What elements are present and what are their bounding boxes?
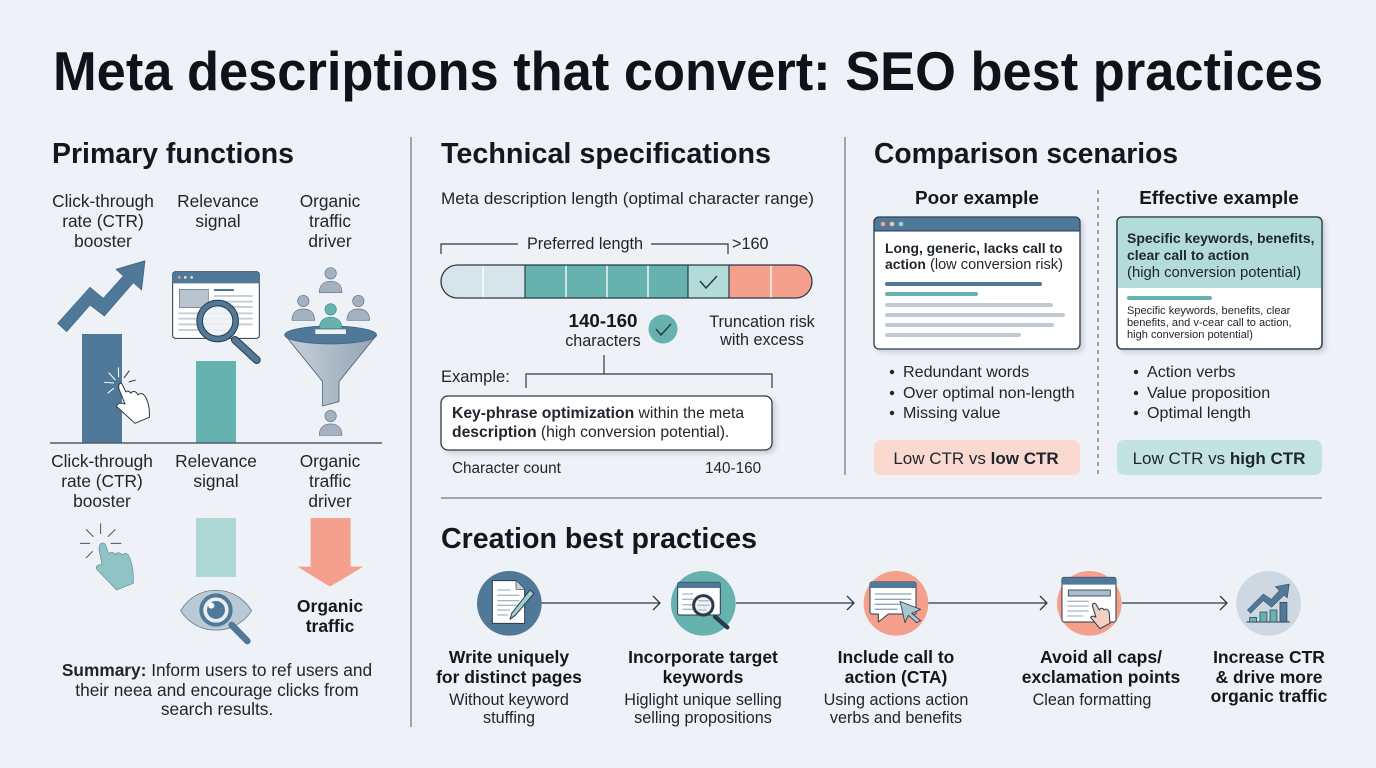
top labels: Organic [300, 191, 361, 211]
lower labels: Organic [300, 451, 361, 471]
heading: primary functions: Primary functions [52, 138, 294, 170]
subheading: effective example: Effective example [1139, 188, 1299, 209]
top labels: driver [308, 231, 352, 251]
icon: browser with magnifier [173, 272, 259, 360]
step 1: Without keyword [449, 691, 569, 709]
callout: truncation risk: with excess [719, 331, 804, 349]
step 4: Avoid all caps/ [1040, 647, 1162, 667]
card: effective example: benefits, and v-cear call to action, [1127, 317, 1292, 329]
bracket: preferred length: >160 [732, 235, 768, 253]
icon: eye with magnifier [181, 590, 252, 641]
icon: browser and hand [1057, 571, 1122, 636]
lower labels: traffic [309, 471, 351, 491]
heading: creation best practices: Creation best practices [441, 523, 757, 555]
subtitle: Meta description length (optimal character range) [441, 190, 814, 208]
icon: rising zigzag arrow [58, 261, 145, 332]
lower labels: booster [73, 491, 131, 511]
panel: comparison scenarios [874, 138, 1322, 475]
summary [62, 660, 372, 719]
pill: low CTR: Low CTR vs low CTR [893, 449, 1059, 468]
step 3 [824, 571, 968, 727]
label: organic traffic: traffic [306, 616, 355, 636]
callout: 140-160 characters: 140-160 [569, 310, 637, 331]
card: effective example: (high conversion potential) [1127, 265, 1301, 281]
character count [452, 460, 761, 477]
step 2: Higlight unique selling [624, 691, 782, 709]
step 5: Increase CTR [1213, 647, 1325, 667]
pill: high CTR [1117, 440, 1322, 475]
card: effective example: clear call to action [1127, 247, 1249, 263]
arrows [541, 596, 1227, 610]
lower labels: Relevance [175, 451, 257, 471]
callout: 140-160 characters: characters [565, 332, 641, 350]
icon: growth chart [1236, 571, 1301, 636]
step 5 [1211, 571, 1328, 706]
label: example: Example: [441, 368, 510, 386]
summary: their neea and encourage clicks from [75, 680, 359, 700]
title: Meta descriptions that convert: SEO best practices [53, 40, 1323, 102]
character count: 140-160 [705, 460, 761, 477]
top labels: Click-through [52, 191, 154, 211]
step 2: Incorporate target [628, 647, 778, 667]
icon: browser search [671, 571, 736, 636]
callout: truncation risk [709, 313, 816, 349]
heading: comparison scenarios: Comparison scenarios [874, 138, 1178, 170]
summary: Summary: Inform users to ref users and [62, 660, 372, 680]
card: effective example: high conversion potential) [1127, 329, 1253, 341]
bar: relevance [196, 361, 236, 443]
summary: search results. [161, 699, 273, 719]
step 4: Clean formatting [1033, 691, 1151, 709]
example box: Key-phrase optimization within the meta [452, 405, 744, 422]
step 3: action (CTA) [845, 667, 947, 687]
lower labels [51, 451, 361, 511]
card: poor example [874, 217, 1080, 349]
panel: creation best practices [436, 523, 1328, 727]
callout: truncation risk: Truncation risk [709, 313, 816, 331]
icon: clicking hand [104, 367, 149, 423]
bar: light teal relevance [196, 518, 236, 577]
bracket: preferred length: Preferred length [527, 235, 643, 253]
panel: primary functions [50, 138, 382, 719]
lower labels: rate (CTR) [61, 471, 143, 491]
pill: high CTR: Low CTR vs high CTR [1133, 449, 1305, 468]
card: effective example [1117, 217, 1322, 349]
character count: Character count [452, 460, 562, 477]
icon: document and pen [477, 571, 542, 636]
label: organic traffic: Organic [297, 596, 363, 616]
callout: 140-160 characters [565, 310, 678, 350]
lower labels: Click-through [51, 451, 153, 471]
step 5: organic traffic [1211, 686, 1328, 706]
list: effective [1134, 363, 1270, 422]
top labels: rate (CTR) [62, 211, 144, 231]
label: organic traffic [297, 596, 363, 636]
list: effective: Value proposition [1147, 384, 1270, 402]
list: effective: Action verbs [1147, 363, 1236, 381]
subheading: poor example: Poor example [915, 188, 1039, 209]
heading: technical specifications: Technical specifications [441, 138, 771, 170]
step 3: Include call to [838, 647, 954, 667]
icon: traffic funnel with people [285, 268, 377, 435]
top labels: booster [74, 231, 132, 251]
pill: low CTR [874, 440, 1080, 475]
bracket: preferred length [441, 235, 768, 254]
card: effective example: Specific keywords, benefits, clear [1127, 305, 1291, 317]
top labels [52, 191, 361, 251]
lower labels: driver [308, 491, 352, 511]
step 4: exclamation points [1022, 667, 1181, 687]
card: poor example: Long, generic, lacks call to [885, 240, 1063, 256]
step 1: stuffing [483, 709, 535, 727]
step 3: verbs and benefits [830, 709, 962, 727]
length bar [441, 265, 812, 298]
bar: CTR [82, 334, 122, 443]
step 2 [624, 571, 782, 727]
list: poor: Redundant words [903, 363, 1029, 381]
example box: description (high conversion potential). [452, 424, 729, 441]
step 1 [436, 571, 582, 727]
example box [441, 396, 772, 450]
card: poor example: action (low conversion risk) [885, 256, 1063, 273]
icon: teal pointing hand [80, 523, 133, 590]
step 1: Write uniquely [449, 647, 569, 667]
step 3: Using actions action [824, 691, 968, 709]
step 1: for distinct pages [436, 667, 582, 687]
icon: speech browser and cursor [864, 571, 928, 636]
arrow: organic traffic [297, 518, 363, 587]
lower labels: signal [193, 471, 239, 491]
top labels: Relevance [177, 191, 259, 211]
list: poor: Missing value [903, 404, 1001, 422]
step 4 [1022, 571, 1181, 709]
list: effective: Optimal length [1147, 404, 1251, 422]
step 2: keywords [663, 667, 744, 687]
step 5: & drive more [1216, 667, 1323, 687]
top labels: signal [195, 211, 241, 231]
list: poor [890, 363, 1075, 422]
card: effective example: Specific keywords, benefits, [1127, 230, 1315, 246]
top labels: traffic [309, 211, 351, 231]
step 2: selling propositions [634, 709, 772, 727]
list: poor: Over optimal non-length [903, 384, 1075, 402]
panel: technical specifications [441, 138, 816, 477]
